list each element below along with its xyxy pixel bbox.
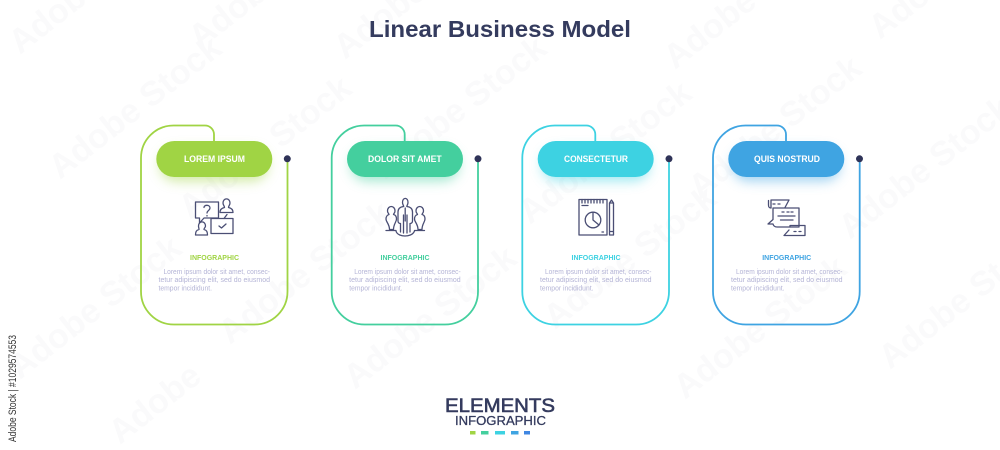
text block: tetur adipiscing elit, sed do eiusmod	[158, 277, 270, 284]
label: INFOGRAPHIC	[572, 255, 620, 262]
icon: questions and answers	[196, 199, 233, 235]
text block: Lorem ipsum dolor sit amet, consec-	[736, 269, 843, 276]
footer logo: ELEMENTS	[445, 396, 555, 417]
text: Adobe Stock	[337, 238, 524, 396]
pill shadow	[351, 149, 459, 181]
label: INFOGRAPHIC	[762, 255, 811, 262]
pill heading	[347, 141, 463, 177]
text: Adobe Stock	[367, 28, 554, 186]
text block: tempor incididunt.	[158, 286, 212, 292]
panel: lorem ipsum	[141, 126, 291, 324]
text: Adobe Stock	[42, 28, 229, 186]
text: Adobe	[102, 356, 208, 450]
pill heading: LOREM IPSUM	[184, 154, 245, 164]
icon: chat bubbles	[768, 200, 805, 236]
label: INFOGRAPHIC	[190, 255, 239, 262]
text: Adobe Stock	[2, 228, 189, 386]
pill heading	[728, 141, 844, 177]
text block: tetur adipiscing elit, sed do eiusmod	[540, 277, 652, 284]
connector dot	[856, 155, 863, 162]
icon: team of three	[386, 198, 425, 236]
text block: Lorem ipsum dolor sit amet, consec-	[354, 269, 461, 276]
title: Linear Business Model	[369, 16, 631, 42]
pill heading	[156, 141, 272, 177]
text: Adobe Stock	[682, 48, 869, 206]
pill heading: DOLOR SIT AMET	[368, 154, 442, 164]
text: Adobe Stock	[667, 248, 854, 406]
text block: tetur adipiscing elit, sed do eiusmod	[349, 277, 461, 284]
pill shadow	[160, 149, 268, 181]
panel: dolor sit amet	[332, 126, 482, 324]
text: Adobe Stock	[172, 68, 359, 226]
pill heading: CONSECTETUR	[564, 154, 628, 164]
card outline	[332, 126, 478, 324]
pill shadow	[732, 149, 840, 181]
panel: quis nostrud	[713, 126, 863, 324]
text: Adobe Stock	[537, 178, 724, 336]
text block	[158, 269, 271, 292]
text: Adobe Stock	[212, 193, 399, 351]
text block: Lorem ipsum dolor sit amet, consec-	[164, 269, 271, 276]
text block: Lorem ipsum dolor sit amet, consec-	[545, 269, 652, 276]
card outline	[713, 126, 860, 324]
text block	[349, 269, 461, 292]
text block: tempor incididunt.	[731, 286, 785, 292]
connector dot	[474, 155, 482, 162]
pill heading: QUIS NOSTRUD	[754, 154, 820, 164]
connector dot	[284, 155, 291, 162]
text block: tempor incididunt.	[540, 286, 594, 292]
text block: tetur adipiscing elit, sed do eiusmod	[731, 277, 843, 284]
pill shadow	[542, 149, 650, 181]
footer logo	[445, 396, 555, 434]
card outline	[141, 126, 288, 324]
text block	[731, 269, 843, 292]
text: Adobe Stock	[512, 73, 699, 231]
text block	[540, 269, 652, 292]
icon: notepad with pie chart and pencil	[579, 200, 614, 235]
connector dot	[666, 155, 672, 162]
panel: consectetur	[522, 126, 672, 324]
pill heading	[538, 141, 654, 177]
stock id caption: Adobe Stock | #1029574553	[7, 335, 19, 442]
card outline	[522, 126, 669, 324]
text block: tempor incididunt.	[349, 286, 403, 292]
footer logo: INFOGRAPHIC	[455, 413, 546, 428]
label: INFOGRAPHIC	[380, 255, 430, 262]
